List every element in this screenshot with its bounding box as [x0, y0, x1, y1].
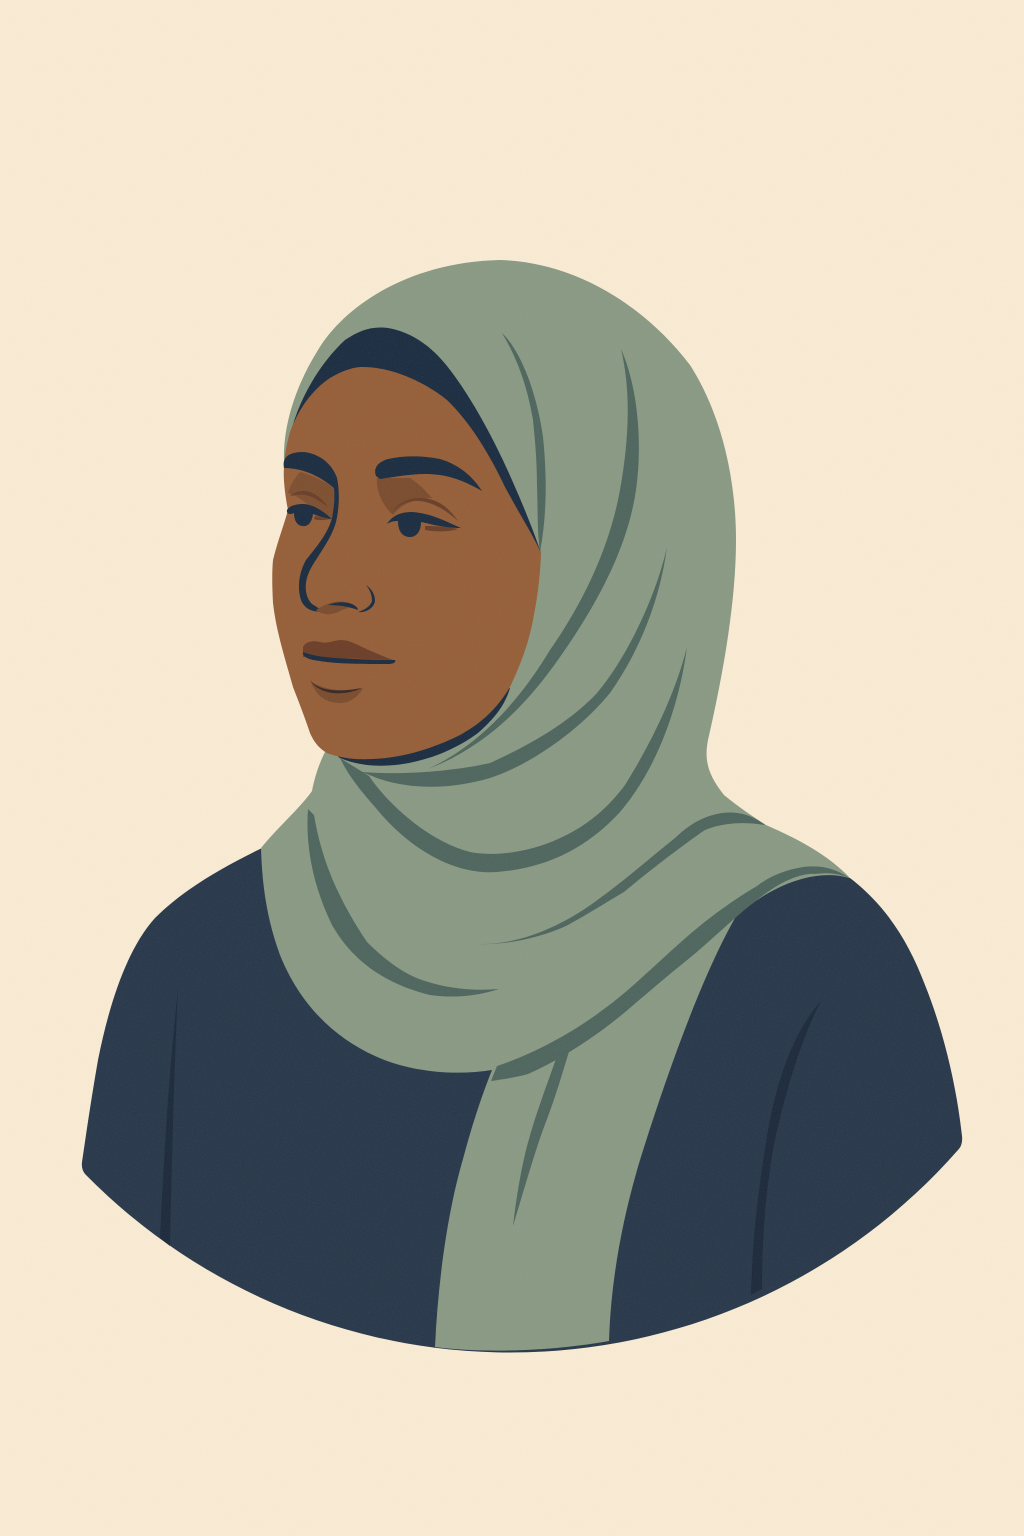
lower lid shadow [425, 526, 458, 531]
dark navy garment [82, 848, 962, 1353]
nose wing [358, 585, 375, 612]
face [272, 367, 541, 759]
left eye crease [290, 491, 328, 507]
fold: inner head [502, 333, 546, 552]
right eye [387, 512, 461, 537]
right eyebrow [375, 456, 482, 491]
fold: scarf edge over shoulder [491, 866, 849, 1081]
mouth line [303, 652, 395, 664]
fold: large wrap curve [340, 647, 687, 872]
hair cap under scarf [288, 328, 541, 553]
left eye shadow [288, 472, 334, 518]
chin shadow [311, 682, 363, 703]
fold: hanging scarf [513, 1048, 570, 1226]
right sleeve fold [751, 1001, 821, 1295]
lower lid shadow [314, 516, 331, 520]
nostril [328, 602, 358, 610]
neck shadow [338, 688, 510, 766]
upper lip [303, 640, 393, 660]
left eye [287, 504, 332, 526]
chin line [310, 680, 362, 693]
right eye shadow [377, 478, 432, 515]
fold: under chin [362, 547, 667, 787]
right eye crease [392, 498, 458, 521]
left eyebrow and nose line [284, 452, 339, 611]
fold: lower left drape [307, 809, 499, 997]
left sleeve fold [160, 990, 178, 1246]
hijab scarf [261, 260, 850, 1351]
nose shadow [316, 601, 349, 614]
fold: shoulder crease [480, 812, 765, 944]
fold: side of head [428, 349, 639, 769]
